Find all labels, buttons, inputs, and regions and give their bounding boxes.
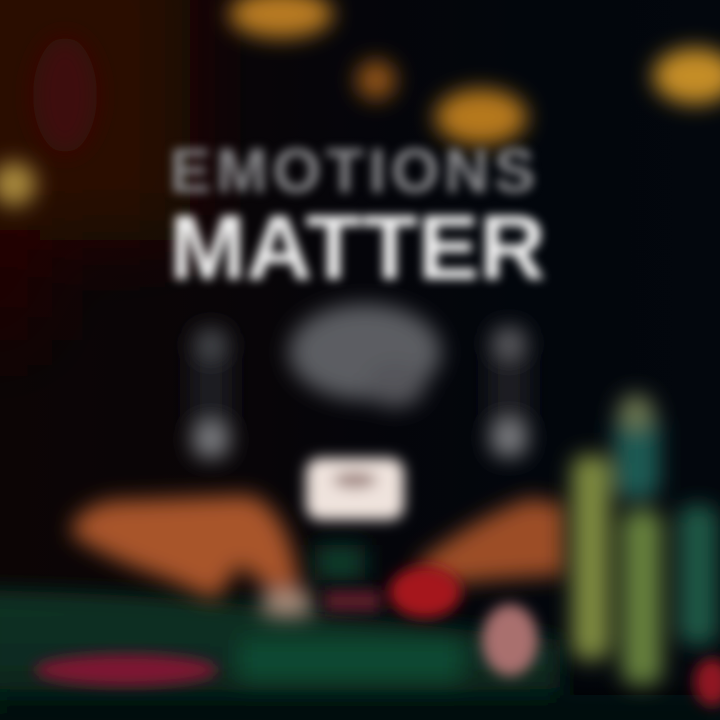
icon: left figure: [190, 325, 232, 460]
red chips: [34, 566, 720, 706]
left hand: [72, 495, 312, 616]
icon: right figure: [488, 325, 530, 460]
table: [0, 545, 720, 720]
stacks of money: [572, 394, 718, 685]
right hand: [415, 498, 565, 585]
lights: [0, 0, 720, 206]
title line 2: MATTER: [169, 197, 546, 299]
icon: brain: [289, 304, 441, 407]
title line 1: EMOTIONS: [170, 137, 540, 206]
icon: white card: [306, 458, 404, 520]
